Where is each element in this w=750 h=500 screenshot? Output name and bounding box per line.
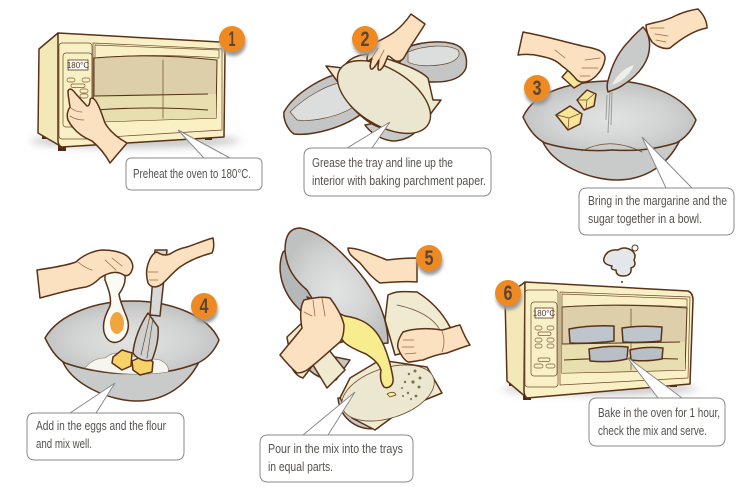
illustration: tilted bowl xyxy=(280,228,388,345)
callout 5: Pour in the mix into the trays xyxy=(268,442,403,456)
panel: step 3 margarine and sugar xyxy=(518,9,734,235)
illustration: oven: 180°C xyxy=(533,309,555,318)
badge 6 xyxy=(495,280,522,310)
panel: step 4 eggs and flour xyxy=(27,238,219,460)
icon: left hand with butter xyxy=(518,32,605,88)
illustration: bowl xyxy=(523,81,696,180)
badge 4: 4 xyxy=(200,295,209,318)
illustration: oven xyxy=(505,282,693,400)
illustration: parchment lined tray xyxy=(325,46,443,148)
illustration: oven: 180°C xyxy=(67,61,89,70)
callout 6: Bake in the oven for 1 hour, xyxy=(598,406,720,420)
badge 2 xyxy=(352,26,379,56)
illustration: cake trays xyxy=(569,326,663,362)
callout 4: Add in the eggs and the flour xyxy=(36,419,166,433)
icon: upper right hand xyxy=(348,248,417,283)
callout 3 xyxy=(579,137,734,235)
callout 2 xyxy=(304,122,491,196)
callout 6: check the mix and serve. xyxy=(598,424,707,438)
illustration: right tray xyxy=(395,42,466,82)
illustration: speckles xyxy=(401,370,422,400)
illustration: yellow mix xyxy=(307,297,393,388)
illustration: back parchment trays xyxy=(287,292,450,388)
callout 2: Grease the tray and line up the xyxy=(312,156,453,170)
callout 1 xyxy=(126,130,262,190)
badge 1 xyxy=(219,26,246,56)
oven shadow xyxy=(502,383,698,395)
panel: step 1 preheat oven xyxy=(30,26,262,190)
badge 1: 1 xyxy=(228,28,236,51)
badge 5 xyxy=(416,245,443,275)
panel: step 2 grease tray xyxy=(284,14,491,196)
icon: whisk and right hand xyxy=(133,238,214,361)
icon: pouring bowl and right hand xyxy=(606,9,707,133)
illustration: oven xyxy=(38,33,225,151)
icon: lower right fist xyxy=(398,325,470,362)
callout 4: and mix well. xyxy=(36,437,92,451)
panel: step 5 pour mix xyxy=(260,228,470,482)
callout 4 xyxy=(27,383,184,460)
icon: hand pressing button xyxy=(67,89,127,163)
badge 2: 2 xyxy=(360,28,370,51)
oven shadow xyxy=(30,134,240,148)
callout 6 xyxy=(589,357,725,446)
illustration: left tray xyxy=(284,73,360,134)
badge 6: 6 xyxy=(504,282,512,305)
callout 5 xyxy=(260,392,413,482)
illustration: bowl xyxy=(45,301,219,401)
badge 5: 5 xyxy=(424,247,434,270)
badge 3: 3 xyxy=(532,77,542,100)
callout 1: Preheat the oven to 180°C. xyxy=(133,167,251,181)
icon: butter cubes xyxy=(556,90,596,130)
illustration: front parchment tray xyxy=(335,354,442,432)
callout 5: in equal parts. xyxy=(268,460,333,474)
icon: hand xyxy=(367,14,425,70)
icon: egg and left hand xyxy=(37,250,133,342)
icon: steam cloud xyxy=(604,245,638,283)
icon: butter cubes xyxy=(112,350,153,375)
panel: step 6 bake xyxy=(495,245,725,446)
icon: left hand xyxy=(280,297,344,373)
badge 3 xyxy=(524,75,551,105)
callout 2: interior with baking parchment paper. xyxy=(312,174,486,188)
illustration: flour xyxy=(85,353,168,374)
illustration: lower tray xyxy=(365,118,423,141)
callout 3: sugar together in a bowl. xyxy=(588,212,702,226)
badge 4 xyxy=(191,293,218,323)
